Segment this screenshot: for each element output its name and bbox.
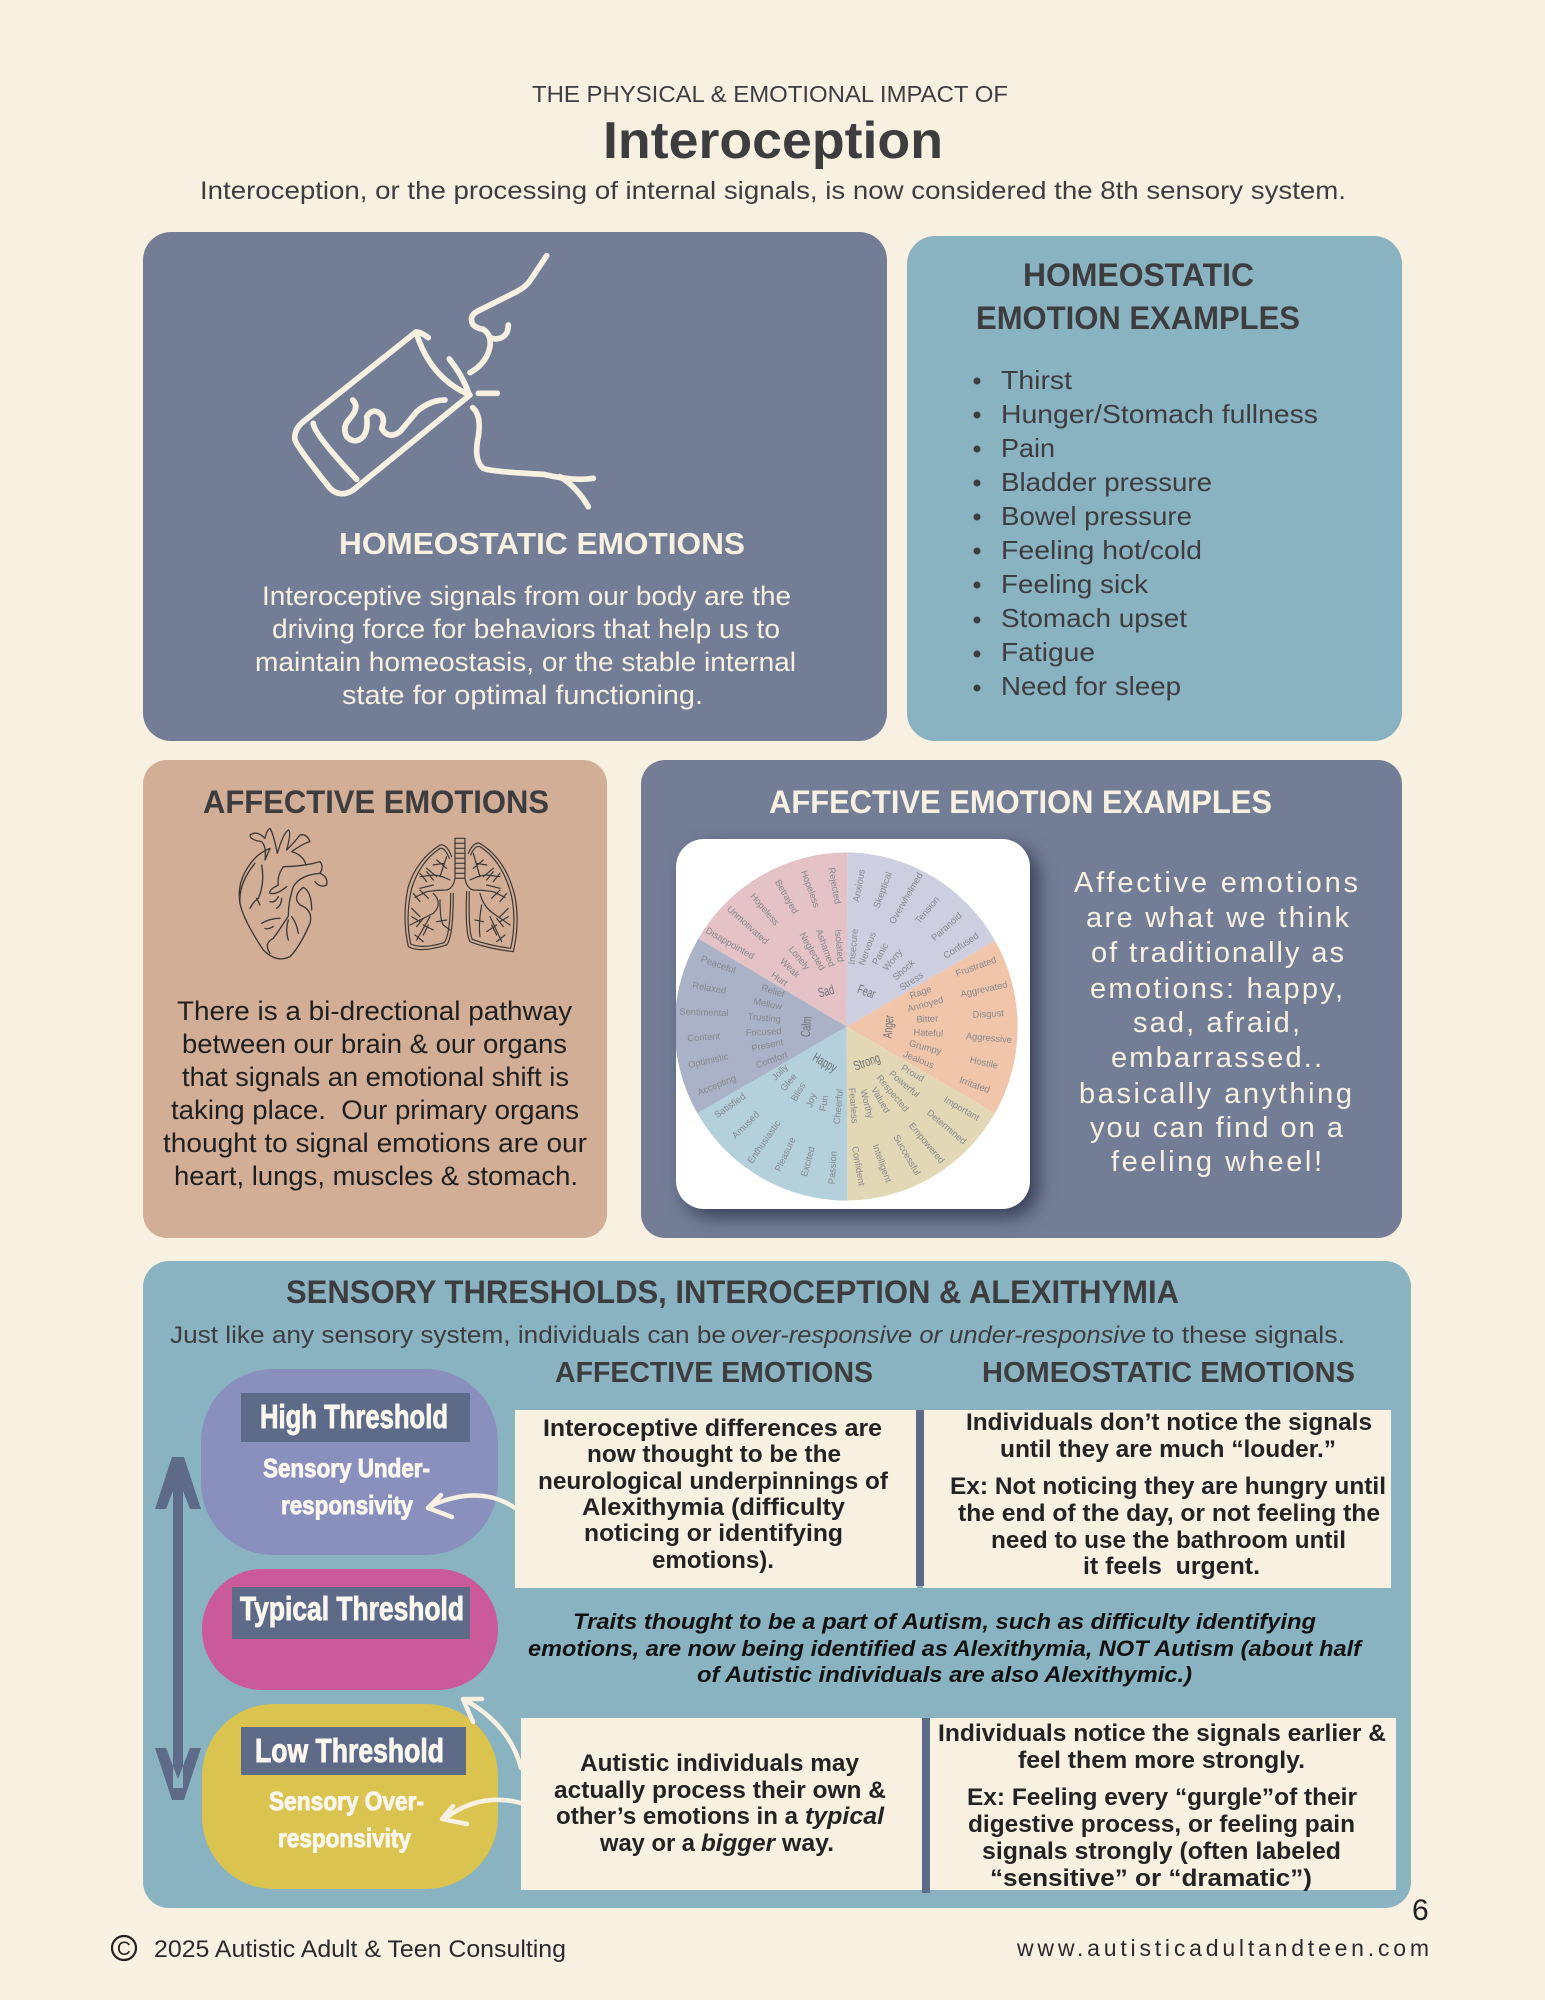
- box: homeostatic, high threshold: [923, 1409, 1391, 1588]
- chart: feeling wheel sectors: Grumpy: [908, 1038, 943, 1057]
- text: homeostatic description: [255, 581, 796, 710]
- icon: anatomical heart: [239, 828, 327, 959]
- list: homeostatic examples: Bowel pressure: [1001, 501, 1192, 531]
- text: affective description: There is a bi-drectional pathway: [177, 996, 573, 1026]
- callout: autism and alexithymia: emotions, are now being identified as Alexithymia, NOT Autism (about half: [528, 1636, 1364, 1661]
- chart: feeling wheel sectors: Tension: [913, 894, 941, 926]
- chart: feeling wheel sectors: Hurt: [769, 970, 790, 988]
- chart: feeling wheel sectors: Important: [942, 1094, 982, 1123]
- chart: feeling wheel sectors: Enthusiastic: [745, 1118, 783, 1165]
- icon: lungs: [405, 838, 517, 952]
- chart: feeling wheel sectors: Irritated: [958, 1075, 991, 1095]
- list: homeostatic examples: [974, 365, 1318, 701]
- chart: feeling wheel sectors: Insecure: [847, 928, 860, 965]
- text: homeostatic description: Interoceptive signals from our body are the: [262, 581, 791, 611]
- panel: homeostatic emotion examples: [907, 236, 1402, 741]
- footer: copyright: C: [117, 1939, 131, 1960]
- box: affective, low threshold: way or a: [599, 1830, 696, 1857]
- text: affective emotion explanation: feeling wheel!: [1111, 1146, 1322, 1178]
- list: homeostatic examples: Hunger/Stomach fullness: [1001, 399, 1318, 429]
- pill: low threshold: [202, 1704, 498, 1889]
- chart: feeling wheel sectors: Powerful: [887, 1068, 921, 1099]
- chart: feeling wheel sectors: Relaxed: [692, 980, 727, 996]
- list: homeostatic examples: Feeling hot/cold: [1001, 535, 1202, 565]
- box: homeostatic, high threshold: Individuals don’t notice the signals: [966, 1409, 1372, 1436]
- box: homeostatic, low threshold: digestive process, or feeling pain: [968, 1811, 1355, 1838]
- pill: typical threshold: Typical Threshold: [240, 1590, 464, 1627]
- card: feeling wheel: [675, 839, 1030, 1209]
- footer: copyright: 2025 Autistic Adult & Teen Consulting: [154, 1936, 566, 1963]
- chart: feeling wheel sectors: Sad: [816, 982, 836, 1000]
- title block: Interoception, or the processing of internal signals, is now considered the 8th sensory system.: [200, 177, 1346, 205]
- heading: affective emotion examples: AFFECTIVE EMOTION EXAMPLES: [769, 784, 1272, 820]
- list: homeostatic examples: Thirst: [1001, 365, 1073, 395]
- heading: affective emotions: AFFECTIVE EMOTIONS: [203, 784, 549, 820]
- box: homeostatic, low threshold: “sensitive” or “dramatic”): [990, 1865, 1312, 1892]
- text: affective description: thought to signal emotions are our: [163, 1128, 587, 1158]
- pill: high threshold: responsivity: [281, 1490, 413, 1520]
- text: homeostatic description: driving force for behaviors that help us to: [272, 614, 780, 644]
- text: affective description: [163, 996, 587, 1191]
- column headings: HOMEOSTATIC EMOTIONS: [982, 1357, 1355, 1389]
- chart: feeling wheel sectors: Confused: [941, 931, 980, 961]
- box: homeostatic, high threshold: Ex: Not noticing they are hungry until: [950, 1473, 1386, 1500]
- chart: feeling wheel sectors: Relief: [760, 983, 786, 1000]
- chart: feeling wheel sectors: Unmotivated: [725, 904, 770, 946]
- panel: affective emotion examples: [641, 760, 1402, 1238]
- chart: feeling wheel sectors: Rejected: [827, 867, 843, 905]
- chart: feeling wheel sectors: Weak: [778, 956, 802, 980]
- chart: feeling wheel sectors: Worthy: [858, 1088, 876, 1120]
- text: sensory intro: to these signals.: [1152, 1322, 1345, 1349]
- divider bar top: [916, 1410, 924, 1586]
- text: sensory intro: over-responsive or under-responsive: [731, 1322, 1146, 1349]
- box: affective, high threshold: Interoceptive differences are: [543, 1415, 882, 1442]
- page number: 6: [1412, 1894, 1429, 1927]
- chart: feeling wheel sectors: Focused: [746, 1026, 782, 1038]
- box: homeostatic, high threshold: until they are much “louder.”: [1000, 1436, 1336, 1463]
- panel: sensory thresholds: [143, 1261, 1411, 1908]
- chart: feeling wheel sectors: Intelligent: [870, 1143, 894, 1184]
- box: affective, high threshold: noticing or identifying: [584, 1520, 843, 1547]
- chart: feeling wheel sectors: Skeptical: [871, 870, 894, 909]
- box: affective, high threshold: [515, 1410, 917, 1588]
- chart: feeling wheel sectors: Joy: [804, 1091, 819, 1109]
- chart: feeling wheel sectors: Ashamed: [814, 928, 837, 968]
- pill: low threshold: responsivity: [278, 1823, 411, 1853]
- chart: feeling wheel sectors: Disappointed: [704, 925, 756, 961]
- heading: homeostatic emotion examples: [976, 257, 1300, 336]
- chart: feeling wheel sectors: Happy: [810, 1050, 840, 1075]
- chart: feeling wheel sectors: Accepting: [696, 1073, 738, 1098]
- text: affective emotion explanation: sad, afraid,: [1133, 1007, 1300, 1039]
- text: affective emotion explanation: basically anything: [1079, 1078, 1352, 1110]
- list: homeostatic examples: Stomach upset: [1001, 603, 1188, 633]
- chart: feeling wheel sectors: Satisfied: [712, 1091, 748, 1120]
- callout: autism and alexithymia: of Autistic individuals are also Alexithymic.): [697, 1662, 1192, 1687]
- heading: homeostatic emotion examples: HOMEOSTATIC: [1023, 257, 1254, 293]
- column headings: [555, 1357, 1355, 1389]
- chart: feeling wheel sectors: Anger: [880, 1014, 897, 1039]
- chart: feeling wheel sectors: Bliss: [789, 1081, 808, 1103]
- footer: website: www.autisticadultandteen.com: [1016, 1935, 1429, 1961]
- pill: typical threshold: [202, 1569, 498, 1690]
- icon: drinking glass at mouth: [295, 256, 593, 507]
- chart: feeling wheel sectors: Excited: [799, 1146, 817, 1178]
- text: affective emotion explanation: of traditionally as: [1091, 937, 1344, 969]
- heading: homeostatic emotions: HOMEOSTATIC EMOTIONS: [339, 526, 745, 561]
- chart: feeling wheel sectors: Determined: [925, 1108, 968, 1146]
- chart: feeling wheel sectors: Rage: [908, 984, 933, 1001]
- chart: feeling wheel sectors: Nervous: [857, 930, 878, 967]
- chart: feeling wheel sectors: Cheerful: [832, 1089, 845, 1125]
- text: sensory intro: Just like any sensory system, individuals can be: [170, 1322, 726, 1349]
- box: homeostatic, low threshold: [929, 1718, 1396, 1892]
- infographic page: [110, 86, 1428, 1962]
- chart: feeling wheel sectors: Frustrated: [954, 955, 998, 979]
- box: affective, high threshold: emotions).: [652, 1547, 774, 1574]
- chart: feeling wheel sectors: Neglected: [797, 931, 827, 972]
- chart: feeling wheel sectors: Valued: [869, 1085, 892, 1115]
- text: affective emotion explanation: are what we think: [1086, 902, 1350, 934]
- column headings: AFFECTIVE EMOTIONS: [555, 1357, 873, 1389]
- box: affective, low threshold: [521, 1718, 923, 1890]
- box: affective, high threshold: Alexithymia (difficulty: [582, 1494, 846, 1521]
- chart: feeling wheel sectors: Sentimental: [679, 1006, 729, 1018]
- chart: feeling wheel sectors: Empowered: [907, 1121, 946, 1165]
- chart: feeling wheel sectors: Stress: [897, 970, 925, 993]
- heading: homeostatic emotion examples: EMOTION EXAMPLES: [976, 300, 1300, 336]
- pill: low threshold: Sensory Over-: [269, 1786, 424, 1816]
- text: homeostatic description: state for optimal functioning.: [342, 680, 703, 710]
- chart: feeling wheel sectors: Annoyed: [906, 995, 944, 1014]
- box: affective, low threshold: other’s emotions in a: [556, 1803, 799, 1830]
- text: affective emotion explanation: [1074, 867, 1358, 1178]
- box: homeostatic, low threshold: Ex: Feeling every “gurgle”of their: [967, 1784, 1357, 1811]
- chart: feeling wheel sectors: Jolly: [770, 1062, 790, 1082]
- text: affective description: taking place. Our primary organs: [171, 1095, 579, 1125]
- chart: feeling wheel sectors: Hateful: [913, 1027, 943, 1039]
- list: homeostatic examples: Bladder pressure: [1001, 467, 1212, 497]
- text: affective emotion explanation: emotions: happy,: [1090, 973, 1343, 1005]
- text: sensory intro: [170, 1322, 1345, 1349]
- chart: feeling wheel sectors: Comfort: [754, 1049, 789, 1070]
- panel: affective emotions: [143, 760, 607, 1238]
- text: affective description: heart, lungs, muscles & stomach.: [174, 1161, 578, 1191]
- chart: feeling wheel sectors: Fun: [818, 1095, 830, 1112]
- chart: feeling wheel sectors: Strong: [851, 1050, 882, 1074]
- chart: feeling wheel sectors: Anxious: [851, 868, 867, 903]
- box: affective, low threshold: actually process their own &: [554, 1777, 886, 1804]
- pill: high threshold: High Threshold: [260, 1398, 448, 1435]
- text: affective description: that signals an emotional shift is: [182, 1062, 569, 1092]
- pill: high threshold: [201, 1369, 498, 1555]
- box: affective, low threshold: bigger: [701, 1830, 777, 1857]
- chart: feeling wheel sectors: Fear: [856, 981, 878, 1002]
- chart: feeling wheel sectors: Mellow: [752, 996, 783, 1012]
- text: affective emotion explanation: Affective emotions: [1074, 867, 1358, 899]
- chart: feeling wheel sectors: Trusting: [747, 1012, 781, 1024]
- list: homeostatic examples: Feeling sick: [1001, 569, 1149, 599]
- box: homeostatic, high threshold: it feels urgent.: [1083, 1553, 1260, 1580]
- text: homeostatic description: maintain homeostasis, or the stable internal: [255, 647, 796, 677]
- box: affective, high threshold: neurological underpinnings of: [538, 1468, 889, 1495]
- chart: feeling wheel sectors: Worry: [881, 947, 905, 973]
- chart: feeling wheel sectors: Lonely: [787, 944, 812, 972]
- chart: feeling wheel sectors: Hostile: [969, 1055, 999, 1071]
- chart: feeling wheel sectors: Optimistic: [687, 1051, 730, 1070]
- text: affective emotion explanation: you can find on a: [1090, 1112, 1344, 1144]
- list: homeostatic examples: Pain: [1001, 433, 1055, 463]
- chart: feeling wheel sectors: Calm: [798, 1016, 815, 1038]
- double arrow: threshold scale: [155, 1457, 201, 1800]
- box: homeostatic, low threshold: feel them more strongly.: [1018, 1747, 1305, 1774]
- chart: feeling wheel sectors: Hopeless: [799, 869, 822, 909]
- pill: low threshold: Low Threshold: [255, 1732, 444, 1769]
- chart: feeling wheel sectors: Bitter: [916, 1013, 938, 1025]
- chart: feeling wheel sectors: Shock: [891, 957, 917, 982]
- box: homeostatic, high threshold: the end of the day, or not feeling the: [958, 1500, 1380, 1527]
- chart: feeling wheel sectors: Peaceful: [700, 954, 737, 976]
- chart: feeling wheel sectors: Present: [751, 1037, 784, 1054]
- chart: feeling wheel sectors: Aggressive: [966, 1031, 1012, 1045]
- chart: feeling wheel sectors: Hopeless: [748, 891, 781, 928]
- chart: feeling wheel sectors: Jealous: [902, 1049, 936, 1070]
- chart: feeling wheel sectors: Glee: [778, 1072, 799, 1093]
- text: affective description: between our brain & our organs: [182, 1029, 567, 1059]
- chart: feeling wheel sectors: Confident: [850, 1145, 867, 1187]
- text: affective emotion explanation: embarrassed..: [1111, 1042, 1322, 1074]
- title block: Interoception: [603, 112, 943, 170]
- chart: feeling wheel sectors: Isolated: [833, 929, 846, 962]
- box: affective, low threshold: typical: [805, 1803, 885, 1830]
- chart: feeling wheel sectors: Content: [687, 1031, 721, 1043]
- chart: feeling wheel sectors: Successful: [891, 1133, 923, 1177]
- chart: feeling wheel sectors: Panic: [870, 941, 891, 967]
- list: homeostatic examples: Fatigue: [1001, 637, 1095, 667]
- chart: feeling wheel sectors: Aggrevated: [960, 979, 1008, 999]
- box: affective, high threshold: now thought to be the: [587, 1441, 841, 1468]
- box: homeostatic, high threshold: need to use the bathroom until: [991, 1527, 1346, 1554]
- list: homeostatic examples: Need for sleep: [1001, 671, 1181, 701]
- chart: feeling wheel sectors: [675, 852, 1018, 1201]
- heading: sensory thresholds: SENSORY THRESHOLDS, INTEROCEPTION & ALEXITHYMIA: [286, 1274, 1179, 1310]
- chart: feeling wheel sectors: Passion: [827, 1151, 839, 1184]
- chart: feeling wheel sectors: Overwhelmed: [887, 871, 925, 926]
- divider bar bottom: [922, 1718, 930, 1893]
- callout: autism and alexithymia: Traits thought to be a part of Autism, such as difficulty identifying: [573, 1609, 1316, 1634]
- chart: feeling wheel sectors: Betrayed: [773, 878, 800, 915]
- title block: [200, 81, 1346, 205]
- pill: high threshold: Sensory Under-: [263, 1453, 430, 1483]
- title block: THE PHYSICAL & EMOTIONAL IMPACT OF: [532, 81, 1008, 107]
- arrows: boxes to thresholds: [428, 1495, 521, 1824]
- panel: homeostatic emotions: [143, 232, 887, 741]
- box: homeostatic, low threshold: Individuals notice the signals earlier &: [938, 1720, 1386, 1747]
- box: affective, low threshold: way.: [781, 1830, 834, 1857]
- chart: feeling wheel sectors: Disgust: [973, 1008, 1004, 1020]
- chart: feeling wheel sectors: Amused: [730, 1109, 761, 1141]
- chart: feeling wheel sectors: Paranoid: [929, 910, 964, 943]
- box: affective, low threshold: Autistic individuals may: [580, 1750, 860, 1777]
- callout: autism and alexithymia: [528, 1609, 1364, 1687]
- chart: feeling wheel sectors: Proud: [899, 1063, 926, 1084]
- box: homeostatic, low threshold: signals strongly (often labeled: [982, 1838, 1341, 1865]
- chart: feeling wheel sectors: Fearless: [847, 1087, 860, 1124]
- chart: feeling wheel sectors: Respected: [874, 1073, 911, 1114]
- chart: feeling wheel sectors: Pleasure: [773, 1135, 798, 1173]
